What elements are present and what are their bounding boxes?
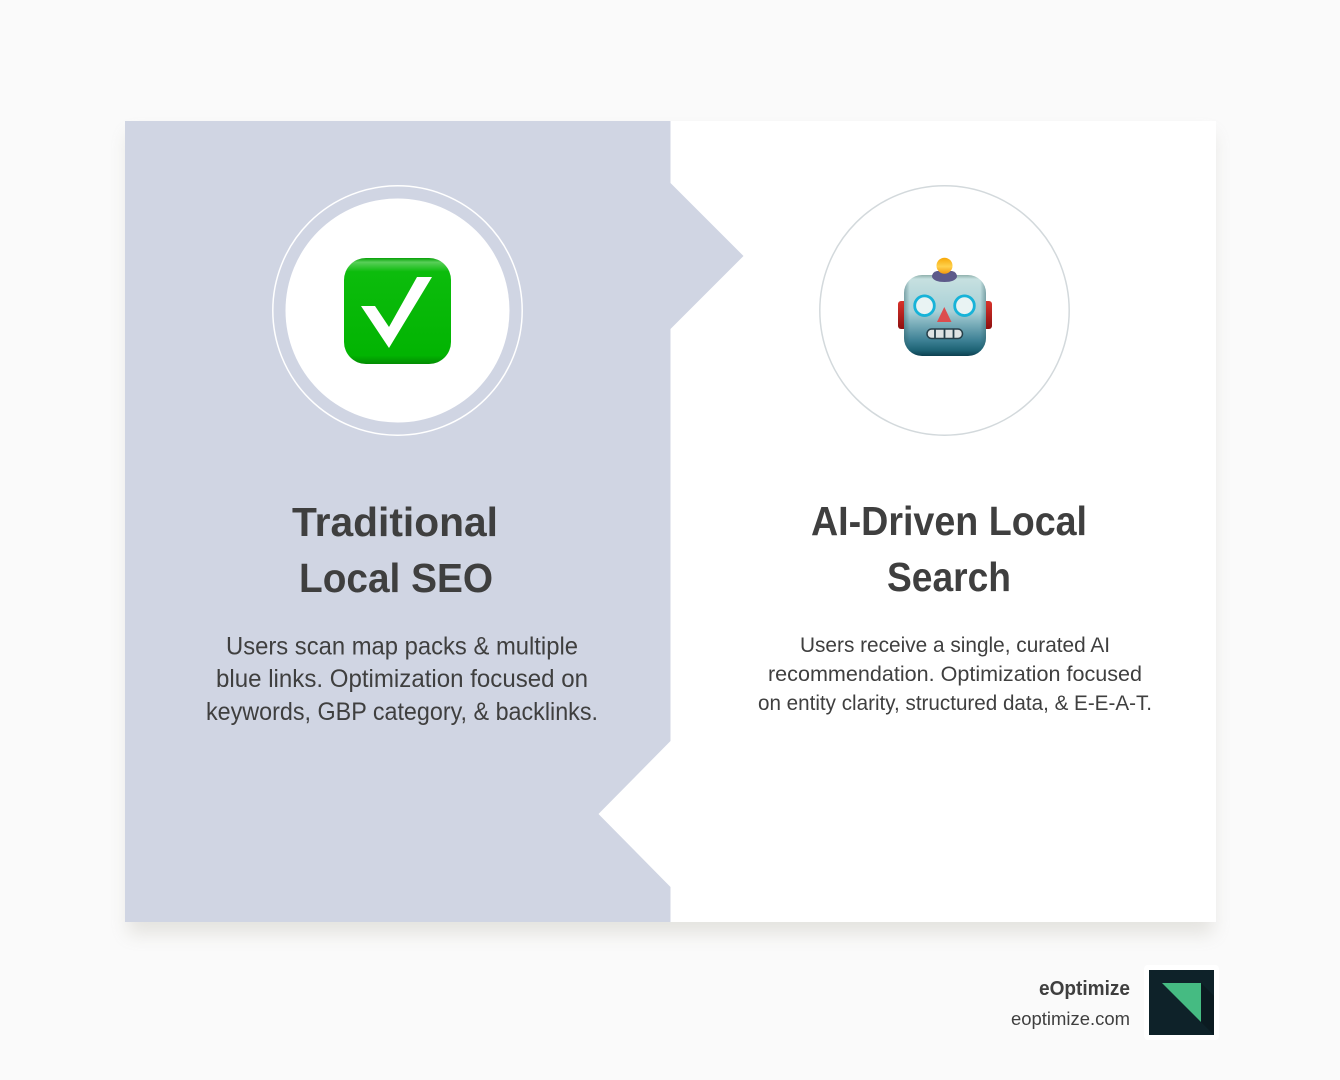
comparison card [125, 121, 1216, 922]
text: AI-driven description: Users receive a single, curated AI [800, 633, 1110, 657]
heading: AI-Driven Local Search: Search [887, 554, 1011, 600]
heading: Traditional Local SEO: Local SEO [299, 555, 493, 601]
text: traditional description: Users scan map packs & multiple [226, 632, 578, 660]
card shadow [128, 134, 1213, 934]
heading: Traditional Local SEO [292, 499, 498, 601]
heading: AI-Driven Local Search: AI-Driven Local [811, 498, 1087, 544]
left panel background with arrow and notch [125, 121, 744, 922]
panel: AI-driven local search [758, 186, 1152, 715]
heading: Traditional Local SEO: Traditional [292, 499, 498, 545]
icon: eOptimize logo [1144, 965, 1219, 1040]
heading: AI-Driven Local Search [811, 498, 1087, 600]
text: traditional description [206, 632, 598, 726]
panel: traditional local SEO [125, 121, 744, 922]
text: AI-driven description [758, 633, 1152, 715]
brand name: eOptimize [1039, 978, 1130, 1000]
text: AI-driven description: recommendation. Optimization focused [768, 662, 1142, 686]
text: AI-driven description: on entity clarity, structured data, & E-E-A-T. [758, 691, 1152, 715]
footer brand [1011, 965, 1219, 1040]
text: traditional description: keywords, GBP category, & backlinks. [206, 698, 598, 726]
text: traditional description: blue links. Optimization focused on [216, 665, 588, 693]
brand url: eoptimize.com [1011, 1008, 1130, 1029]
icon: robot in circle [820, 186, 1069, 435]
icon: check mark in circle [273, 186, 522, 435]
